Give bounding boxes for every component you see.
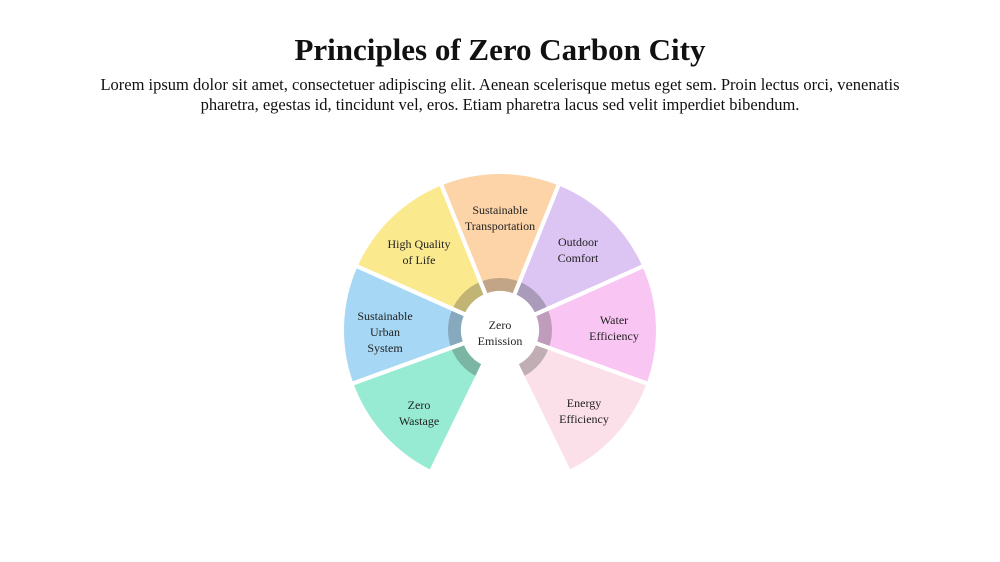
labels: High Quality: [388, 237, 450, 251]
wheel diagram: [344, 174, 656, 470]
labels: Efficiency: [559, 412, 609, 426]
labels: Efficiency: [589, 329, 639, 343]
segment: Energy Efficiency: [516, 343, 648, 472]
labels: Sustainable: [472, 203, 528, 217]
labels: Sustainable: [357, 309, 413, 323]
labels: Urban: [370, 325, 400, 339]
labels: Water: [600, 313, 628, 327]
segment: Outdoor Comfort: [514, 184, 644, 315]
labels: Outdoor: [558, 235, 598, 249]
labels: System: [367, 341, 403, 355]
segment: Sustainable Urban System: [342, 266, 466, 384]
labels: Zero: [408, 398, 430, 412]
labels: Wastage: [399, 414, 439, 428]
segment: High Quality of Life: [356, 184, 486, 315]
labels: Energy: [567, 396, 601, 410]
subtitle text: Lorem ipsum dolor sit amet, consectetuer adipiscing elit. Aenean scelerisque metus eget sem. Proin lectus orci, venenatis pharetra, egestas id, tincidunt vel, eros. Etiam pharetra lacus sed velit imperdiet bibendum.: [100, 75, 900, 114]
segment: Sustainable Transportation: [441, 172, 559, 296]
labels: Emission: [478, 334, 522, 348]
labels: Comfort: [558, 251, 599, 265]
labels: Transportation: [465, 219, 535, 233]
segment: Water Efficiency: [534, 266, 658, 384]
title: Principles of Zero Carbon City: [294, 32, 706, 67]
segment: Zero Wastage: [352, 343, 484, 472]
labels: Zero: [489, 318, 511, 332]
labels: of Life: [403, 253, 435, 267]
inner ring shading: [456, 286, 544, 374]
labels: [357, 203, 639, 428]
